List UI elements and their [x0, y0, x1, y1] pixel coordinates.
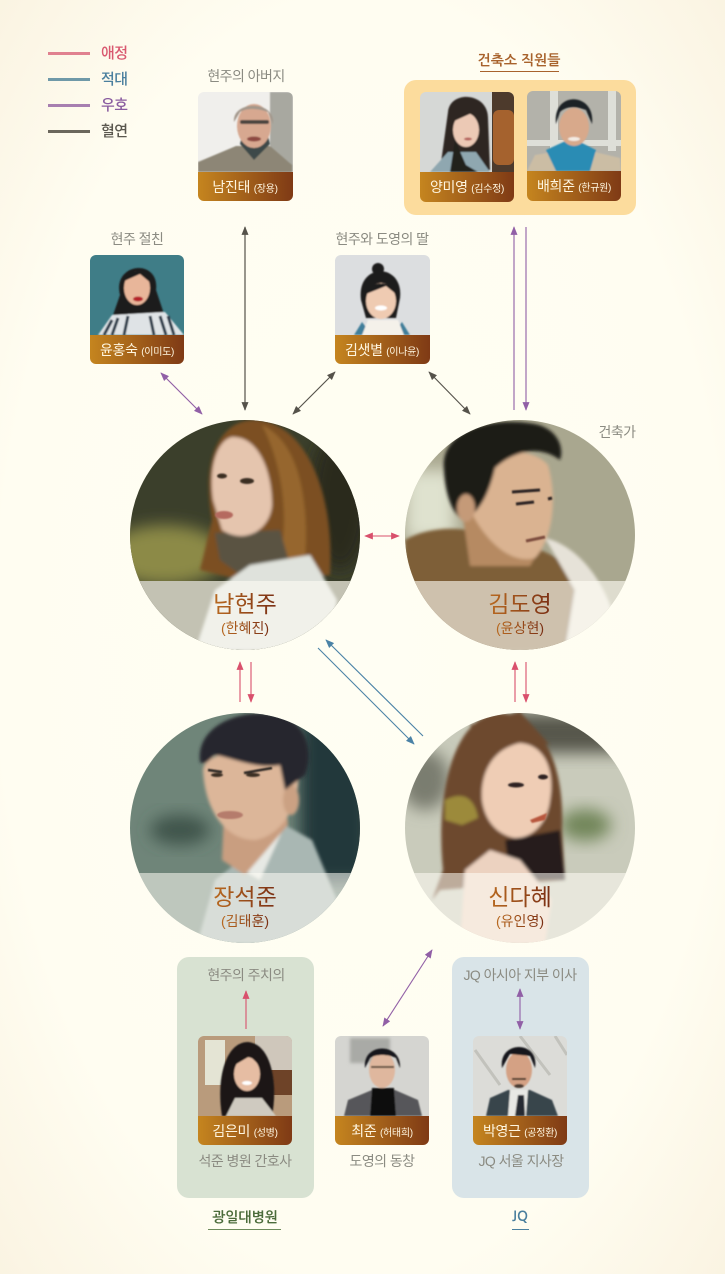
heading: JQ: [512, 1210, 529, 1230]
portrait: Nam Hyun-ju: [130, 420, 360, 650]
legend: hostility: 적대: [101, 71, 128, 88]
caption: classmate: 도영의 동창: [350, 1153, 415, 1169]
card: Kim Saet-byeol: 김샛별 (이나윤): [345, 342, 419, 358]
card: Kim Saet-byeol: [335, 255, 430, 364]
arrow: Do-young to staff: [513, 227, 515, 410]
arrow: friend to Hyun-ju: [161, 373, 202, 414]
arrow: staff to Do-young: [525, 227, 527, 410]
caption: daughter: 현주와 도영의 딸: [336, 231, 429, 247]
legend: affection: 애정: [101, 45, 128, 62]
arrow: Seok-jun to Hyun-ju: [239, 662, 241, 702]
portrait: Kim Do-young: 김도영: [488, 591, 552, 617]
card: Nam Jin-tae: [198, 92, 293, 201]
arrow: daughter to Do-young: [429, 372, 470, 414]
portrait: Nam Hyun-ju: 남현주: [213, 591, 277, 617]
card: Choi Jun: [335, 1036, 429, 1145]
card: Yang Mi-young: [420, 92, 514, 202]
heading: hospital: 광일대병원: [212, 1210, 278, 1225]
panel: JQ background: [452, 957, 589, 1198]
card: Yoon Hong-sook: 윤홍숙 (이미도): [100, 342, 174, 358]
caption: nurse role: 석준 병원 간호사: [198, 1153, 292, 1169]
portrait: Jang Seok-jun: [130, 713, 370, 944]
arrow: Hyun-ju and Do-young: [365, 535, 399, 537]
panel: hospital background: [177, 957, 314, 1198]
caption: architect: 건축가: [598, 424, 636, 440]
card: Kim Eun-mi: 김은미 (성병): [212, 1123, 278, 1139]
card: Kim Eun-mi: [198, 1036, 292, 1145]
legend: blood relation: 혈연: [101, 123, 128, 140]
caption: JQ Seoul branch head: JQ 서울 지사장: [478, 1153, 564, 1169]
legend: [48, 45, 128, 140]
portrait: Kim Do-young: [405, 420, 636, 651]
caption: attending physician: 현주의 주치의: [207, 967, 285, 983]
card: Yoon Hong-sook: [90, 255, 184, 364]
legend: friendship: 우호: [101, 97, 128, 114]
portrait: Shin Da-hye: 신다혜: [488, 884, 552, 910]
heading: architecture office staff: 건축소 직원들: [478, 53, 560, 68]
portrait: Shin Da-hye: (유인영): [496, 913, 544, 929]
heading: hospital: [208, 1210, 281, 1230]
card: Yang Mi-young: 양미영 (김수정): [430, 179, 504, 195]
portrait: Jang Seok-jun: 장석준: [213, 884, 277, 910]
card: Choi Jun: 최준 (허태희): [351, 1123, 413, 1139]
arrow: nurse to physician caption: [245, 991, 247, 1029]
arrow: father to Hyun-ju: [244, 227, 246, 410]
arrow: Hyun-ju to Seok-jun: [250, 662, 252, 702]
arrow: JQ Asia director and branch head: [519, 989, 521, 1029]
portrait: Nam Hyun-ju: (한혜진): [221, 620, 269, 636]
caption: JQ Asia director: JQ 아시아 지부 이사: [463, 967, 577, 983]
arrow: Da-hye and Choi Jun: [383, 950, 432, 1026]
card: Nam Jin-tae: 남진태 (장용): [212, 179, 278, 195]
portrait: Shin Da-hye: [400, 712, 640, 944]
portrait: Kim Do-young: (윤상현): [496, 620, 544, 636]
card: Park Young-geun: 박영근 (공정환): [483, 1123, 557, 1139]
arrow: Do-young to Da-hye: [525, 662, 527, 702]
card: Park Young-geun: [473, 1036, 567, 1145]
panel: architecture office background: [404, 80, 636, 215]
heading: JQ: JQ: [512, 1210, 528, 1224]
card: Bae Hee-jun: [527, 91, 621, 201]
arrow: Hyun-ju to Da-hye: [318, 648, 414, 744]
caption: close friend: 현주 절친: [111, 231, 163, 247]
card: Bae Hee-jun: 배희준 (한규원): [537, 178, 611, 194]
arrow: Da-hye to Hyun-ju: [326, 640, 423, 736]
caption: father: 현주의 아버지: [207, 68, 285, 84]
arrow: Da-hye to Do-young: [514, 662, 516, 702]
arrow: daughter to Hyun-ju: [293, 372, 335, 414]
portrait: Jang Seok-jun: (김태훈): [221, 913, 269, 929]
